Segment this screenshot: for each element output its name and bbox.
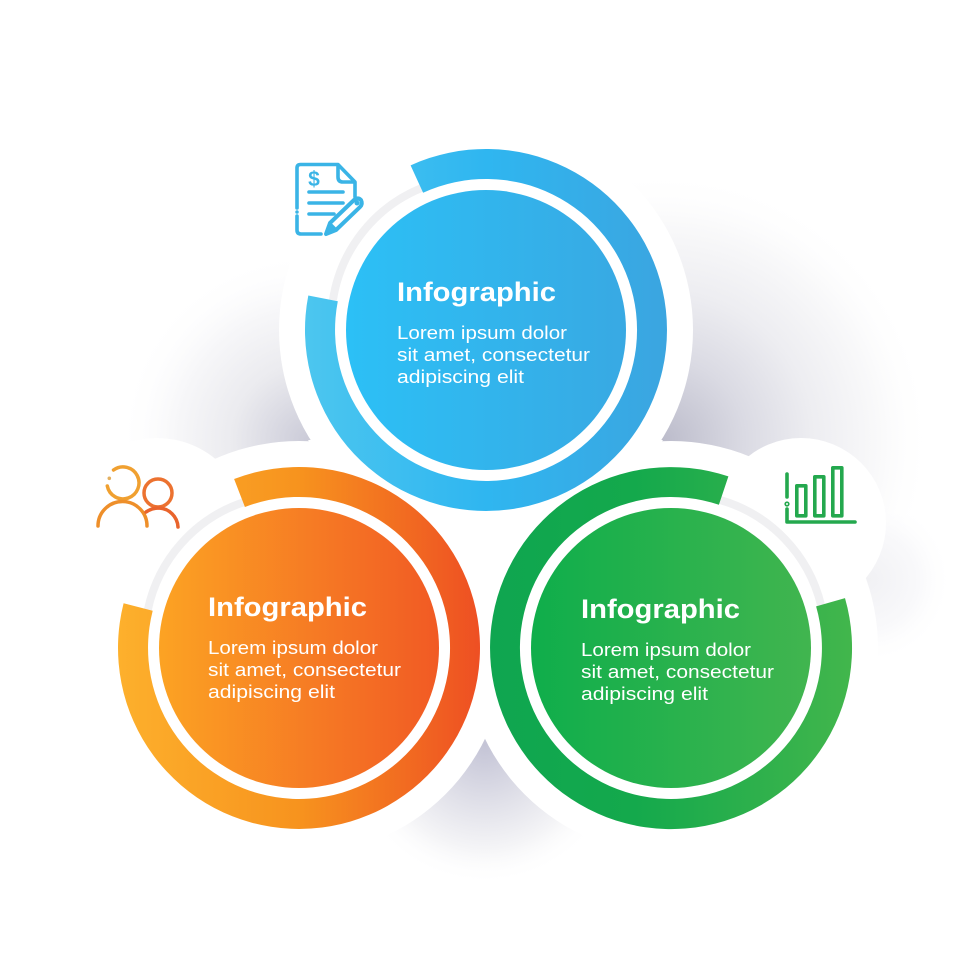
orange body text: adipiscing elit bbox=[208, 681, 335, 702]
blue body text bbox=[397, 322, 590, 387]
green disc bbox=[531, 508, 811, 788]
green grey track arc bbox=[720, 500, 821, 605]
panel: green circle bbox=[490, 467, 852, 829]
orange disc bbox=[159, 508, 439, 788]
green outer ring bbox=[490, 467, 852, 829]
green heading: Infographic bbox=[581, 594, 740, 624]
blue grey track arc bbox=[333, 188, 421, 300]
panel: blue circle bbox=[305, 149, 667, 511]
green body text: sit amet, consectetur bbox=[581, 661, 774, 682]
blue body text: adipiscing elit bbox=[397, 366, 524, 387]
orange body text: Lorem ipsum dolor bbox=[208, 637, 378, 658]
green body text: adipiscing elit bbox=[581, 683, 708, 704]
blue disc bbox=[346, 190, 626, 470]
white backing shape bbox=[65, 123, 886, 855]
orange body text: sit amet, consectetur bbox=[208, 659, 401, 680]
green body text: Lorem ipsum dolor bbox=[581, 639, 751, 660]
panel: orange circle bbox=[118, 467, 480, 829]
blue outer ring bbox=[305, 149, 667, 511]
icon: bar chart bbox=[786, 468, 855, 522]
blue heading: Infographic bbox=[397, 277, 556, 307]
orange outer ring bbox=[118, 467, 480, 829]
blue body text: Lorem ipsum dolor bbox=[397, 322, 567, 343]
icon: document with pen: $ bbox=[308, 168, 320, 191]
orange heading: Infographic bbox=[208, 592, 367, 622]
icon: two people bbox=[98, 467, 178, 527]
green body text bbox=[581, 639, 774, 704]
orange body text bbox=[208, 637, 401, 702]
blue body text: sit amet, consectetur bbox=[397, 344, 590, 365]
icon: document with pen bbox=[296, 164, 362, 234]
background shadows bbox=[118, 170, 953, 885]
orange grey track arc bbox=[148, 502, 243, 610]
